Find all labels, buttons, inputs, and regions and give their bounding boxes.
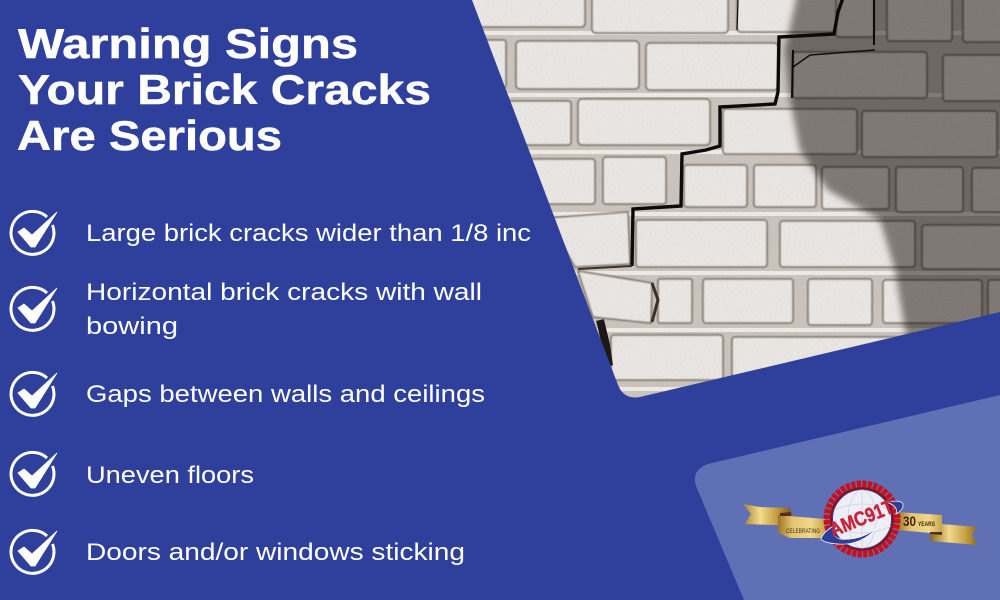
title: Your Brick Cracks [18, 66, 431, 113]
checklist [11, 211, 531, 573]
item 1: large cracks: Large brick cracks wider than 1/8 inc [86, 220, 531, 247]
title: Are Serious [17, 112, 282, 159]
crack [578, 0, 875, 366]
item 2: horizontal cracks: Horizontal brick cracks with wall [86, 279, 482, 306]
item 1: large cracks [11, 211, 531, 254]
logo: AMC911 30 years badge: AMC91T [827, 496, 897, 542]
logo: AMC911 30 years badge: CELEBRATING [786, 528, 820, 535]
item 2: horizontal cracks [11, 279, 482, 340]
item 5: doors and windows [11, 530, 465, 573]
item 3: gaps: Gaps between walls and ceilings [86, 381, 485, 408]
item 3: gaps [11, 372, 485, 415]
logo: AMC911 30 years badge [743, 484, 978, 554]
photo: cracked brick wall [460, 0, 1000, 405]
title [17, 20, 431, 159]
logo: AMC911 30 years badge: YEARS [918, 522, 935, 528]
item 2: horizontal cracks: bowing [86, 313, 178, 340]
item 4: uneven floors: Uneven floors [86, 462, 254, 489]
item 5: doors and windows: Doors and/or windows sticking [86, 539, 465, 566]
logo panel [695, 395, 1000, 600]
title: Warning Signs [18, 20, 358, 67]
item 4: uneven floors [11, 452, 254, 495]
logo: AMC911 30 years badge: 30 [903, 513, 916, 529]
